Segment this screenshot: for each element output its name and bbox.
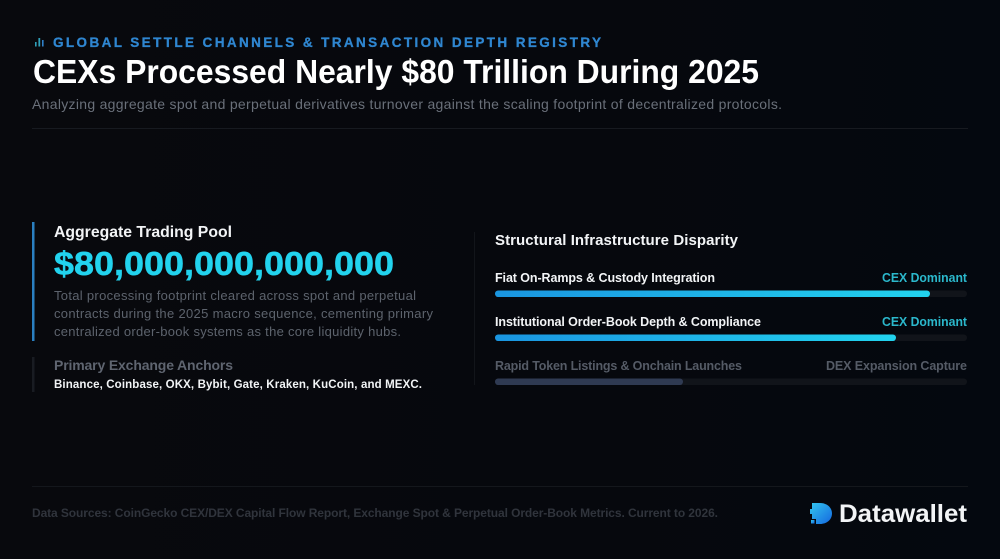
icon: logo mark	[810, 503, 832, 524]
anchors list: Binance, Coinbase, OKX, Bybit, Gate, Kraken, KuCoin, and MEXC.	[54, 379, 422, 391]
row: fiat on-ramps	[495, 271, 968, 297]
pool description: contracts during the 2025 macro sequence, cementing primary	[54, 306, 434, 321]
panel: structural infrastructure disparity	[495, 232, 968, 385]
title: CEXs Processed Nearly $80 Trillion During 2025	[33, 53, 759, 90]
accent bar	[32, 222, 34, 341]
eyebrow: GLOBAL SETTLE CHANNELS & TRANSACTION DEPTH REGISTRY	[53, 35, 601, 50]
row: token listings	[495, 359, 967, 385]
header	[32, 35, 782, 112]
pool value: $80,000,000,000,000	[54, 245, 394, 282]
logo text: Datawallet	[839, 500, 968, 528]
row: order-book depth	[495, 315, 968, 341]
row: order-book depth: CEX Dominant	[882, 315, 968, 329]
icon: bar chart	[35, 38, 44, 46]
row: order-book depth: Institutional Order-Book Depth & Compliance	[495, 315, 761, 329]
row: token listings: Rapid Token Listings & Onchain Launches	[495, 359, 742, 373]
panel: primary exchange anchors	[32, 357, 422, 392]
row: fiat on-ramps: Fiat On-Ramps & Custody Integration	[495, 271, 715, 285]
pool description	[54, 288, 434, 339]
row: token listings: DEX Expansion Capture	[826, 359, 967, 373]
logo: Datawallet	[810, 500, 968, 528]
panel: aggregate trading pool	[32, 222, 434, 341]
footer sources: Data Sources: CoinGecko CEX/DEX Capital Flow Report, Exchange Spot & Perpetual Order-Book Metrics. Current to 2026.	[32, 506, 718, 520]
subtitle: Analyzing aggregate spot and perpetual derivatives turnover against the scaling footprint of decentralized protocols.	[32, 96, 782, 112]
row: fiat on-ramps: CEX Dominant	[882, 271, 968, 285]
pool heading: Aggregate Trading Pool	[54, 224, 232, 241]
pool description: Total processing footprint cleared across spot and perpetual	[54, 288, 416, 303]
disparity heading: Structural Infrastructure Disparity	[495, 232, 739, 249]
pool description: centralized order-book systems as the core liquidity hubs.	[54, 324, 401, 339]
anchors heading: Primary Exchange Anchors	[54, 357, 233, 373]
